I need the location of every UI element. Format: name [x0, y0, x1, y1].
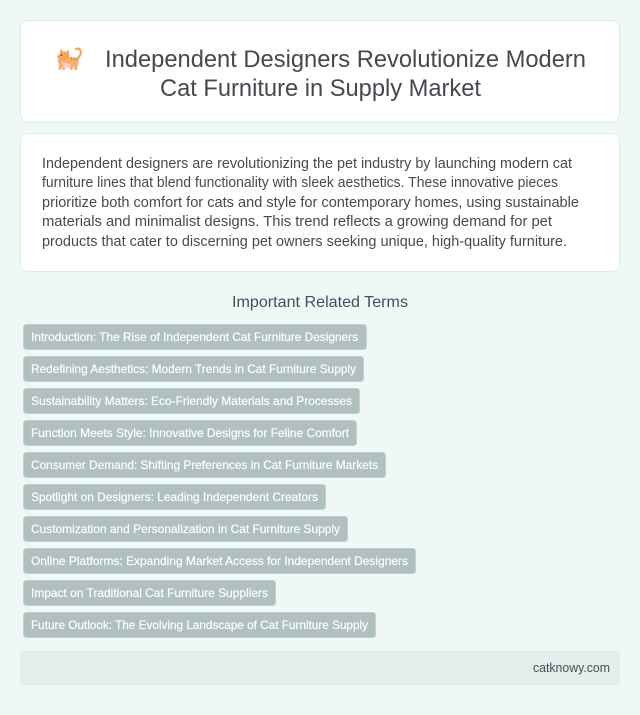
- tag 2: Redefining Aesthetics: Modern Trends in Cat Furniture Supply: [31, 362, 356, 376]
- tag 10: [24, 612, 376, 638]
- tag 9: Impact on Traditional Cat Furniture Suppliers: [31, 586, 268, 600]
- panel: intro text card: [20, 134, 620, 272]
- tag 3: [24, 388, 360, 414]
- tag 5: [24, 452, 386, 478]
- tag 4: [24, 420, 356, 446]
- tag 1: Introduction: The Rise of Independent Cat Furniture Designers: [31, 330, 358, 344]
- title text: Cat Furniture in Supply Market: [160, 75, 481, 102]
- tag 1: [24, 324, 366, 350]
- tag 10: Future Outlook: The Evolving Landscape of Cat Furniture Supply: [31, 618, 368, 632]
- tag 6: Spotlight on Designers: Leading Independent Creators: [31, 490, 318, 504]
- tag 3: Sustainability Matters: Eco-Friendly Materials and Processes: [31, 394, 352, 408]
- intro paragraph: products that cater to discerning pet owners seeking unique, high-quality furniture.: [42, 234, 567, 250]
- icon: cat: [57, 47, 82, 70]
- intro paragraph: prioritize both comfort for cats and style for contemporary homes, using sustainable: [42, 195, 579, 211]
- tag 5: Consumer Demand: Shifting Preferences in Cat Furniture Markets: [31, 458, 378, 472]
- list of related term tags: [24, 324, 416, 638]
- intro paragraph: Independent designers are revolutionizing the pet industry by launching modern cat: [42, 156, 572, 172]
- tag 2: [24, 356, 364, 382]
- tag 8: Online Platforms: Expanding Market Access for Independent Designers: [31, 554, 408, 568]
- footer site name: catknowy.com: [533, 661, 610, 675]
- intro paragraph: materials and minimalist designs. This trend reflects a growing demand for pet: [42, 214, 552, 230]
- tag 8: [24, 548, 416, 574]
- tag 7: [24, 516, 348, 542]
- title text: Independent Designers Revolutionize Modern: [105, 46, 586, 73]
- panel: title card: [20, 20, 620, 122]
- footer bar: [20, 651, 620, 685]
- tag 7: Customization and Personalization in Cat Furniture Supply: [31, 522, 340, 536]
- tag 6: [24, 484, 326, 510]
- tag 9: [24, 580, 276, 606]
- intro paragraph: [42, 156, 579, 250]
- intro paragraph: furniture lines that blend functionality with sleek aesthetics. These innovative pieces: [42, 175, 558, 191]
- tag 4: Function Meets Style: Innovative Designs for Feline Comfort: [31, 426, 350, 440]
- heading: important related terms: Important Related Terms: [232, 294, 408, 311]
- title text: [105, 46, 586, 102]
